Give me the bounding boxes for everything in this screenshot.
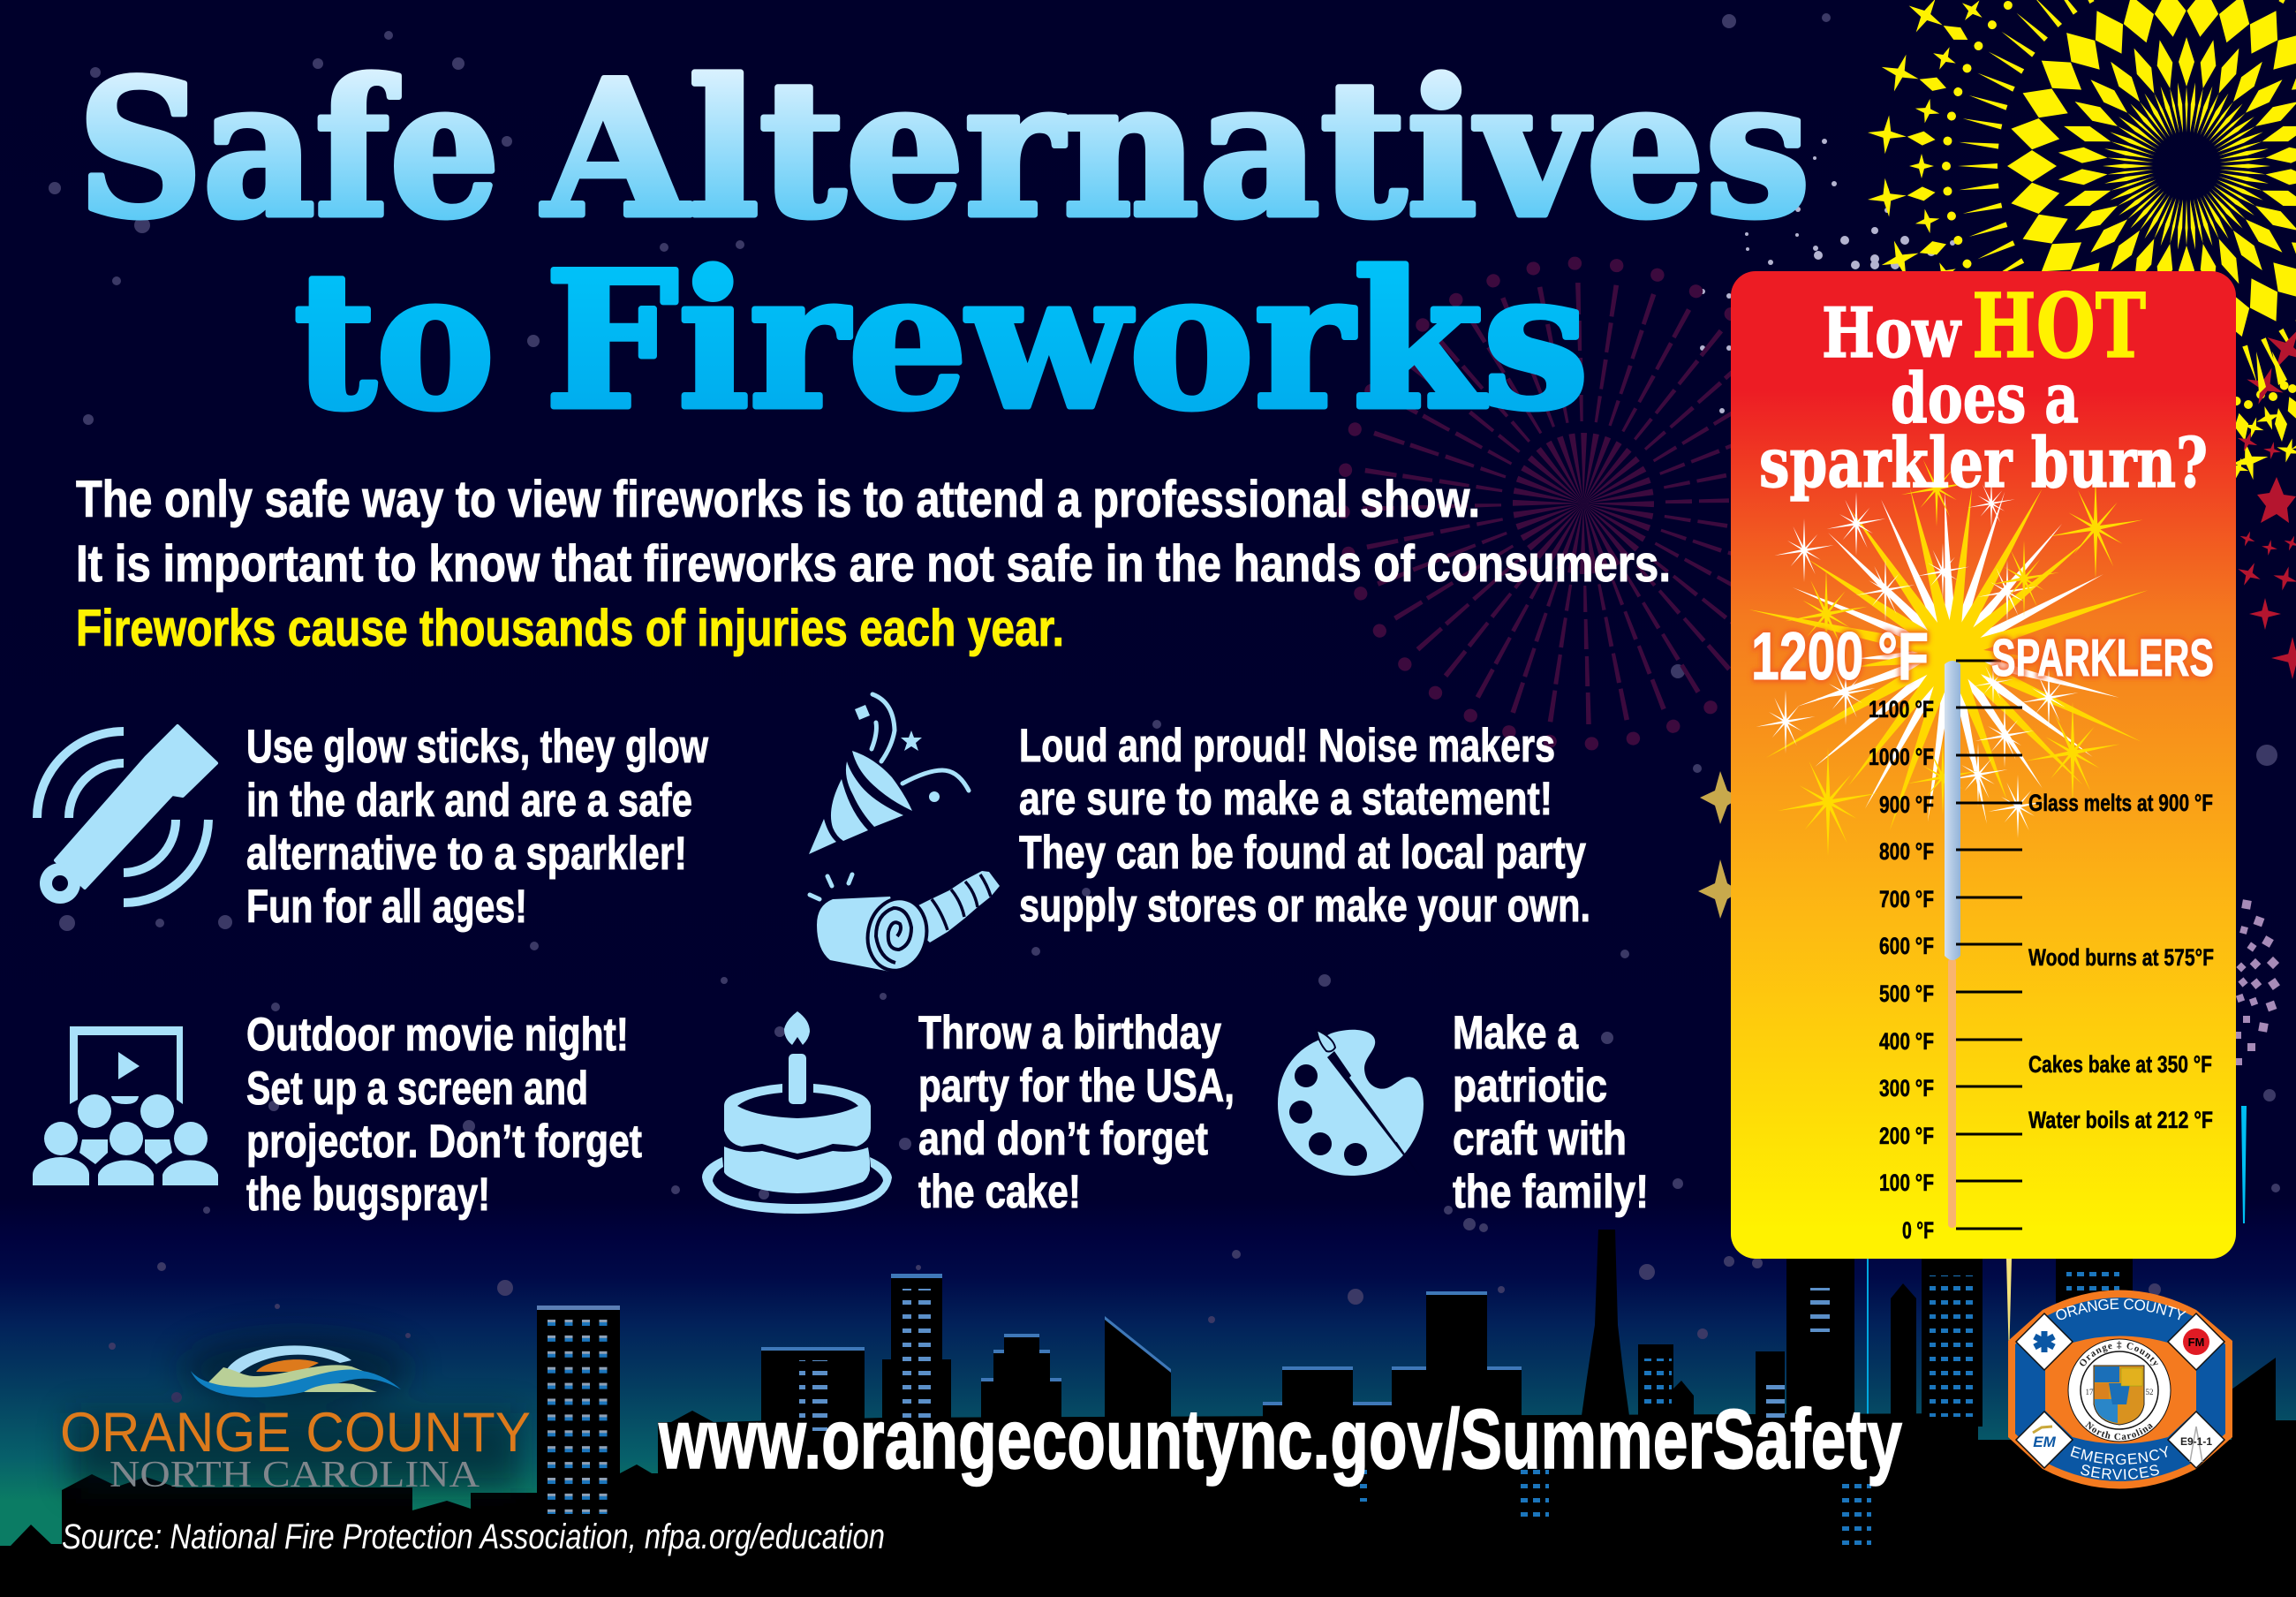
white sparks xyxy=(1756,478,2079,838)
badge corner diamonds xyxy=(2016,1313,2224,1468)
title line 2: to xyxy=(294,231,495,450)
logo subline: NORTH CAROLINA xyxy=(110,1455,480,1495)
text: movie night: projector. Don’t forget xyxy=(246,1116,642,1168)
yellow rays xyxy=(1748,485,2150,833)
blower roll body xyxy=(817,897,910,972)
text: noise makers: supply stores or make your own. xyxy=(1019,880,1590,932)
icon: paint palette xyxy=(1278,1030,1424,1181)
intro text: It is important to know that fireworks are not safe in the hands of consumers. xyxy=(76,535,1671,593)
panel: how hot does a sparkler burn xyxy=(1731,271,2236,1259)
badge seal: 52 xyxy=(2146,1388,2153,1396)
intro text: The only safe way to view fireworks is to attend a professional show. xyxy=(76,471,1480,528)
badge: Orange County Emergency Services xyxy=(2008,1290,2232,1489)
text: birthday party xyxy=(918,1007,1235,1218)
logo dark halo xyxy=(71,1334,521,1488)
badge fire marshal emblem xyxy=(2183,1328,2209,1355)
streak lines xyxy=(1867,1106,2247,1453)
badge outer shape xyxy=(2008,1290,2232,1489)
title line 1: Alternatives xyxy=(541,39,1810,259)
text: glow sticks xyxy=(246,721,709,933)
firework: red burst at right edge xyxy=(2232,317,2296,679)
reference annotations: Cakes bake at 350 °F xyxy=(2028,1051,2212,1078)
text: patriotic craft xyxy=(1453,1007,1649,1218)
badge curved text: ORANGE COUNTY xyxy=(2056,1298,2186,1320)
badge curved text: EMERGENCY xyxy=(2070,1445,2168,1465)
skyline: mid-left buildings xyxy=(761,1274,1522,1435)
text: glow sticks: in the dark and are a safe xyxy=(246,775,692,827)
title line 1: Safe xyxy=(78,39,500,259)
badge seal: Orange ‡ County xyxy=(2080,1341,2158,1366)
temperature labels: 300 °F xyxy=(1879,1075,1934,1101)
temperature labels: 900 °F xyxy=(1879,791,1934,818)
sparkler burst xyxy=(1748,450,2150,856)
intro text xyxy=(76,471,1671,657)
text: movie night: Outdoor movie night! xyxy=(246,1009,629,1061)
text: noise makers xyxy=(1019,720,1590,932)
icon: party popper xyxy=(809,694,969,854)
skyline: lower windows xyxy=(1360,1466,1871,1555)
temperature labels: 1100 °F xyxy=(1869,696,1934,723)
text: movie night: the bugspray! xyxy=(246,1169,490,1221)
badge E9-1-1 mark: E9-1-1 xyxy=(2180,1435,2212,1448)
badge EM mark xyxy=(2033,1427,2057,1450)
reference annotations: Glass melts at 900 °F xyxy=(2028,790,2213,816)
card heading xyxy=(1759,274,2208,503)
intro text: Fireworks cause thousands of injuries each year. xyxy=(76,600,1064,657)
temperature labels: 1000 °F xyxy=(1869,744,1934,770)
badge EM mark: EM xyxy=(2033,1434,2057,1450)
icon: party blower xyxy=(810,871,1000,976)
temperature labels: 700 °F xyxy=(1879,886,1934,912)
label: 1200 F: 1200 °F xyxy=(1751,619,1929,694)
firework: yellow sparks over red burst xyxy=(2225,352,2296,481)
card background xyxy=(1731,271,2236,1259)
skyline: downtown windows xyxy=(1643,1265,2119,1420)
text: patriotic craft: patriotic xyxy=(1453,1060,1607,1112)
badge star of life xyxy=(2035,1331,2054,1352)
firework: yellow burst xyxy=(1789,0,2296,581)
title line 2: Fireworks xyxy=(545,231,1589,450)
skyline: spire and downtown buildings xyxy=(1581,1230,2133,1435)
text: movie night: Set up a screen and xyxy=(246,1063,588,1115)
sparkler stick xyxy=(1945,661,1960,1228)
label: 1200 F: 1200 °F xyxy=(1751,619,1929,694)
skyline: black ground mass xyxy=(0,1358,2296,1597)
icon: movie audience xyxy=(33,1026,218,1185)
temperature labels: 500 °F xyxy=(1879,980,1934,1007)
text: birthday party: party for the USA, xyxy=(918,1060,1235,1112)
text: patriotic craft: craft with xyxy=(1453,1113,1627,1165)
text: patriotic craft: Make a xyxy=(1453,1007,1578,1059)
temperature labels: 100 °F xyxy=(1879,1169,1934,1196)
text: patriotic craft: the family! xyxy=(1453,1166,1649,1218)
blower tube xyxy=(910,871,1000,942)
skyline: tower windows rows xyxy=(799,1289,931,1431)
text: glow sticks: Use glow sticks, they glow xyxy=(246,721,709,773)
temperature labels: 800 °F xyxy=(1879,838,1934,865)
badge seal xyxy=(2068,1339,2171,1442)
temperature labels: 600 °F xyxy=(1879,933,1934,959)
city skyline xyxy=(0,1230,2296,1597)
skyline: roof highlights xyxy=(761,1230,1854,1405)
text: birthday party: Throw a birthday xyxy=(918,1007,1221,1059)
white rays xyxy=(1791,490,2120,825)
card heading: does a xyxy=(1891,359,2079,439)
badge curved text xyxy=(2056,1298,2186,1480)
temperature ticks xyxy=(1956,661,2022,1229)
logo: Orange County North Carolina xyxy=(60,1334,531,1495)
reference annotations xyxy=(2028,790,2214,1133)
card heading: How xyxy=(1822,293,1962,374)
badge E9-1-1 mark xyxy=(2180,1427,2212,1462)
source note: Source: National Fire Protection Association, nfpa.org/education xyxy=(62,1518,885,1556)
temperature labels: 0 °F xyxy=(1902,1217,1934,1244)
firework: dim purple burst xyxy=(1335,255,1832,752)
card heading: HOT xyxy=(1972,274,2146,378)
blower spiral xyxy=(861,893,933,976)
text: birthday party: the cake! xyxy=(918,1166,1081,1218)
icon: glow stick xyxy=(37,726,216,904)
yellow sparks xyxy=(1778,450,2143,856)
reference annotations: Water boils at 212 °F xyxy=(2028,1107,2213,1133)
firework: gold stars behind card xyxy=(1698,771,1740,919)
sparkler hot core xyxy=(1929,631,1978,680)
text: movie night xyxy=(246,1009,642,1221)
logo mark xyxy=(191,1345,401,1397)
badge curved text: SERVICES xyxy=(2081,1465,2159,1480)
skyline: tower with windows xyxy=(537,1306,620,1518)
text: glow sticks: alternative to a sparkler! xyxy=(246,828,687,880)
temperature labels xyxy=(1869,696,1934,1244)
badge shield xyxy=(2094,1366,2144,1425)
text: noise makers: Loud and proud! Noise makers xyxy=(1019,720,1555,772)
temperature labels: 200 °F xyxy=(1879,1123,1934,1149)
logo wordmark: ORANGE COUNTY xyxy=(60,1402,531,1464)
badge seal: North Carolina xyxy=(2085,1420,2153,1440)
reference annotations: Wood burns at 575°F xyxy=(2028,944,2214,971)
light dots near the yellow firework xyxy=(1700,139,1955,413)
badge fire marshal emblem: FM xyxy=(2188,1336,2204,1349)
badge seal: 17 xyxy=(2086,1388,2094,1396)
text: glow sticks: Fun for all ages! xyxy=(246,881,527,933)
text: noise makers: are sure to make a statement! xyxy=(1019,773,1552,825)
temperature labels: 400 °F xyxy=(1879,1028,1934,1055)
text: birthday party: and don’t forget xyxy=(918,1113,1208,1165)
badge orange centre xyxy=(2045,1336,2196,1443)
title xyxy=(78,39,1810,450)
website url: www.orangecountync.gov/SummerSafety xyxy=(658,1392,1902,1487)
firework: lilac squares xyxy=(2234,899,2280,1065)
text: noise makers: They can be found at local party xyxy=(1019,827,1586,879)
icon: birthday cake xyxy=(702,1011,892,1214)
